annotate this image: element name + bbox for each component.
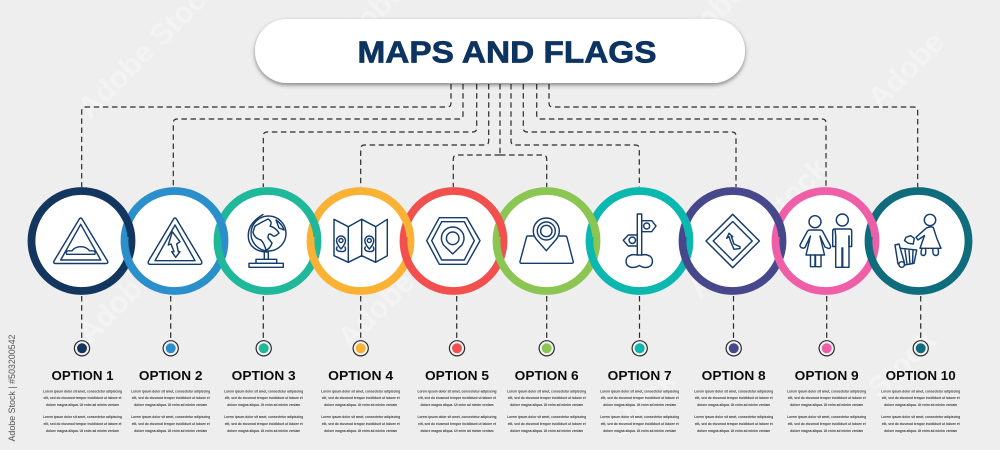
- description: dolore magna aliqua. Ut enim ad minim veniam: [134, 428, 208, 433]
- marker dot: [256, 341, 271, 356]
- description: Lorem ipsum dolor sit amet, consectetur adipiscing: [787, 414, 867, 419]
- label: OPTION 1: [52, 368, 114, 383]
- icon: folded map with pins: [334, 219, 387, 262]
- stock image id side text: Adobe Stock | #503200542: [7, 334, 17, 442]
- icon: location pin on map: [520, 218, 573, 263]
- ring: option 7: [590, 191, 690, 291]
- panel: option 9: [787, 341, 867, 433]
- text: Stock: [862, 324, 943, 405]
- description: Lorem ipsum dolor sit amet, consectetur adipiscing: [694, 414, 774, 419]
- description: elit, sed do eiusmod tempor incididunt ut labore et: [44, 421, 122, 426]
- description: elit, sed do eiusmod tempor incididunt ut labore et: [695, 395, 773, 400]
- lower connector lines: [82, 296, 921, 340]
- description: [321, 388, 401, 433]
- description: Lorem ipsum dolor sit amet, consectetur adipiscing: [43, 414, 123, 419]
- description: Lorem ipsum dolor sit amet, consectetur adipiscing: [321, 388, 401, 393]
- description: elit, sed do eiusmod tempor incididunt ut labore et: [322, 421, 400, 426]
- ring: option 3: [218, 191, 318, 291]
- title pill: [255, 19, 745, 83]
- description: elit, sed do eiusmod tempor incididunt ut labore et: [418, 421, 497, 426]
- description: dolore magna aliqua. Ut enim ad minim veniam: [227, 428, 301, 433]
- description: dolore magna aliqua. Ut enim ad minim veniam: [420, 402, 494, 407]
- label: OPTION 8: [702, 368, 766, 383]
- description: [418, 388, 497, 433]
- description: Lorem ipsum dolor sit amet, consectetur adipiscing: [787, 388, 867, 393]
- icon: person throwing trash in bin: [895, 214, 941, 267]
- marker dot: [449, 341, 465, 356]
- white circle backgrounds: [32, 191, 968, 291]
- label: OPTION 9: [795, 368, 859, 383]
- text: Adobe Stock: [682, 152, 835, 305]
- description: Lorem ipsum dolor sit amet, consectetur adipiscing: [131, 388, 211, 393]
- text: Adobe Stock: [72, 197, 225, 350]
- marker dot: [819, 341, 834, 356]
- description: elit, sed do eiusmod tempor incididunt ut labore et: [788, 421, 866, 426]
- description: dolore magna aliqua. Ut enim ad minim veniam: [324, 402, 398, 407]
- description: Lorem ipsum dolor sit amet, consectetur adipiscing: [418, 414, 497, 419]
- description: Lorem ipsum dolor sit amet, consectetur adipiscing: [43, 388, 123, 393]
- description: [43, 388, 123, 433]
- icon: hexagon sign with pin: [427, 218, 480, 264]
- ring: option 2: [124, 191, 224, 291]
- icon: speed bump road sign: [54, 218, 108, 264]
- description: dolore magna aliqua. Ut enim ad minim veniam: [420, 428, 494, 433]
- label: OPTION 2: [139, 368, 202, 383]
- description: elit, sed do eiusmod tempor incididunt ut labore et: [132, 421, 210, 426]
- panel: option 10: [881, 341, 961, 433]
- description: dolore magna aliqua. Ut enim ad minim veniam: [697, 402, 771, 407]
- description: elit, sed do eiusmod tempor incididunt ut labore et: [132, 395, 210, 400]
- marker dot: [726, 341, 741, 356]
- description: Lorem ipsum dolor sit amet, consectetur adipiscing: [600, 388, 680, 393]
- text: Adobe: [862, 26, 951, 115]
- description: Lorem ipsum dolor sit amet, consectetur adipiscing: [224, 414, 304, 419]
- description: dolore magna aliqua. Ut enim ad minim veniam: [510, 428, 584, 433]
- panel: option 7: [600, 341, 680, 433]
- description: elit, sed do eiusmod tempor incididunt ut labore et: [44, 395, 122, 400]
- label: OPTION 3: [232, 368, 296, 383]
- panel: option 3: [224, 341, 304, 433]
- icon: high voltage warning sign: [148, 218, 202, 264]
- icon: desk globe: [248, 214, 286, 267]
- label: OPTION 7: [608, 368, 672, 383]
- description: dolore magna aliqua. Ut enim ad minim veniam: [324, 428, 398, 433]
- description: Lorem ipsum dolor sit amet, consectetur adipiscing: [507, 388, 587, 393]
- description: dolore magna aliqua. Ut enim ad minim veniam: [790, 402, 864, 407]
- panel: option 1: [43, 341, 123, 433]
- icon: winding road diamond sign: [706, 214, 759, 268]
- description: Lorem ipsum dolor sit amet, consectetur adipiscing: [694, 388, 774, 393]
- description: Lorem ipsum dolor sit amet, consectetur adipiscing: [507, 414, 587, 419]
- description: elit, sed do eiusmod tempor incididunt ut labore et: [601, 421, 679, 426]
- text: Adobe Stock: [332, 202, 485, 355]
- label: OPTION 10: [886, 368, 956, 383]
- ring: option 8: [682, 191, 782, 291]
- panel: option 8: [694, 341, 774, 433]
- description: elit, sed do eiusmod tempor incididunt ut labore et: [695, 421, 773, 426]
- marker dot: [539, 341, 554, 356]
- panel: option 6: [507, 341, 587, 433]
- description: elit, sed do eiusmod tempor incididunt ut labore et: [882, 421, 960, 426]
- description: [507, 388, 587, 433]
- label: OPTION 4: [328, 368, 394, 383]
- description: dolore magna aliqua. Ut enim ad minim veniam: [134, 402, 208, 407]
- panel: option 2: [131, 341, 211, 433]
- description: Lorem ipsum dolor sit amet, consectetur adipiscing: [600, 414, 680, 419]
- description: [694, 388, 774, 433]
- description: elit, sed do eiusmod tempor incididunt ut labore et: [322, 395, 400, 400]
- marker dot: [74, 341, 90, 356]
- description: Lorem ipsum dolor sit amet, consectetur adipiscing: [881, 388, 961, 393]
- ring: option 5: [404, 191, 504, 291]
- description: elit, sed do eiusmod tempor incididunt ut labore et: [882, 395, 960, 400]
- description: [131, 388, 211, 433]
- description: Lorem ipsum dolor sit amet, consectetur adipiscing: [881, 414, 961, 419]
- description: elit, sed do eiusmod tempor incididunt ut labore et: [788, 395, 866, 400]
- description: dolore magna aliqua. Ut enim ad minim veniam: [510, 402, 584, 407]
- icon: signpost with two pointers: [623, 214, 656, 268]
- description: [787, 388, 867, 433]
- ring: option 9: [776, 191, 876, 291]
- description: Lorem ipsum dolor sit amet, consectetur adipiscing: [321, 414, 401, 419]
- label: OPTION 5: [425, 368, 489, 383]
- text: Stock: [602, 364, 683, 445]
- marker dot: [163, 341, 178, 356]
- description: dolore magna aliqua. Ut enim ad minim veniam: [46, 428, 119, 433]
- ring: option 6: [496, 191, 596, 291]
- marker dot: [353, 341, 368, 356]
- ring: option 10: [868, 191, 968, 291]
- description: elit, sed do eiusmod tempor incididunt ut labore et: [601, 395, 679, 400]
- description: dolore magna aliqua. Ut enim ad minim veniam: [790, 428, 864, 433]
- description: dolore magna aliqua. Ut enim ad minim veniam: [603, 402, 677, 407]
- title: MAPS AND FLAGS: [358, 35, 656, 69]
- panel: option 4: [321, 341, 401, 433]
- description: dolore magna aliqua. Ut enim ad minim veniam: [884, 428, 958, 433]
- ring: option 1: [32, 191, 132, 291]
- description: Lorem ipsum dolor sit amet, consectetur adipiscing: [224, 388, 304, 393]
- marker dot: [913, 341, 928, 356]
- description: elit, sed do eiusmod tempor incididunt ut labore et: [508, 421, 586, 426]
- description: dolore magna aliqua. Ut enim ad minim veniam: [46, 402, 119, 407]
- description: dolore magna aliqua. Ut enim ad minim veniam: [697, 428, 771, 433]
- description: dolore magna aliqua. Ut enim ad minim veniam: [603, 428, 677, 433]
- description: elit, sed do eiusmod tempor incididunt ut labore et: [418, 395, 497, 400]
- description: elit, sed do eiusmod tempor incididunt ut labore et: [225, 395, 303, 400]
- description: Lorem ipsum dolor sit amet, consectetur adipiscing: [131, 414, 211, 419]
- description: dolore magna aliqua. Ut enim ad minim veniam: [227, 402, 301, 407]
- ring: option 4: [310, 191, 410, 291]
- description: [881, 388, 961, 433]
- marker dot: [632, 341, 647, 356]
- connector lines from title to options: [82, 84, 918, 187]
- description: elit, sed do eiusmod tempor incididunt ut labore et: [508, 395, 586, 400]
- panel: option 5: [418, 341, 497, 433]
- description: [600, 388, 680, 433]
- label: OPTION 6: [515, 368, 579, 383]
- description: elit, sed do eiusmod tempor incididunt ut labore et: [225, 421, 303, 426]
- icon: woman and man: [800, 214, 852, 267]
- description: Lorem ipsum dolor sit amet, consectetur adipiscing: [418, 388, 497, 393]
- description: [224, 388, 304, 433]
- description: dolore magna aliqua. Ut enim ad minim veniam: [884, 402, 958, 407]
